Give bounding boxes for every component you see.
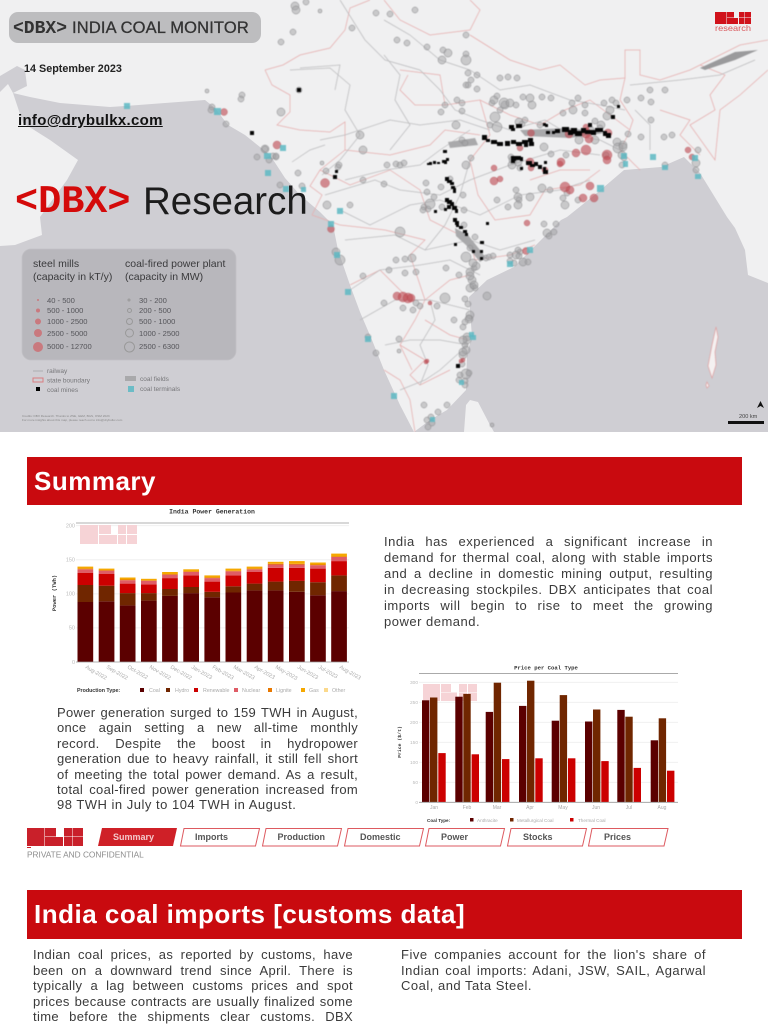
- nav: Production: Production: [278, 832, 325, 842]
- Sri Lanka: [464, 400, 494, 432]
- sea: [0, 93, 414, 432]
- month labels: Jun-2023: [296, 665, 319, 681]
- month labels: Apr: [526, 805, 534, 811]
- paragraph: India demand: imports will begin to rise to meet the growing: [384, 598, 713, 613]
- paragraph: power generation: once again setting a new all-time monthly: [57, 720, 358, 735]
- brand heading: [15, 180, 308, 224]
- legend: Other: [332, 688, 345, 694]
- paragraph: power generation: record. Despite the boost in hydropower: [57, 736, 358, 751]
- chart: India Power Generation: 50: [69, 626, 75, 632]
- legend: Coal: [149, 688, 160, 694]
- paragraph: coal prices: time before the shipments clear customs. DBX: [33, 1009, 353, 1024]
- nav: Domestic: Domestic: [360, 832, 401, 842]
- month labels: Jan-2023: [190, 665, 213, 681]
- paragraph: importing companies: Five companies account for the lion's share of: [401, 947, 706, 962]
- paragraph: coal prices: been on a downward trend since April. There is: [33, 963, 353, 978]
- paragraph: India demand: power demand.: [384, 614, 480, 629]
- nav: Imports: [180, 828, 260, 846]
- chart: Price per Coal Type: 300: [410, 680, 418, 686]
- month labels: Jun: [592, 805, 600, 811]
- top-right research logo: research: [715, 23, 751, 33]
- legend: [77, 688, 345, 694]
- coal-fired power plants: [205, 0, 701, 430]
- footer logo: [27, 828, 83, 848]
- map panel: India coal infrastructure: [0, 0, 768, 432]
- month labels: [430, 805, 667, 811]
- chart: Price per Coal Type: Price per Coal Type: [514, 664, 579, 672]
- chart: Price per Coal Type: 200: [410, 720, 418, 726]
- map key: lines, mines, fields: state boundary: [47, 378, 91, 384]
- map legend panel: (capacity in MW): [125, 271, 203, 283]
- map legend panel: 2500 - 6300: [139, 342, 180, 351]
- title pill: [9, 12, 261, 43]
- grouped bars: [422, 681, 674, 802]
- chart: India Power Generation: Power (TWh): [51, 575, 58, 611]
- chart: India Power Generation: India Power Generation: [169, 508, 255, 516]
- heading: India coal imports: India coal imports [customs data]: [34, 899, 465, 929]
- month labels: Apr-2023: [253, 665, 276, 681]
- railway lines: [290, 0, 755, 390]
- map legend panel: steel mills: [33, 258, 79, 270]
- map legend panel: [22, 249, 236, 360]
- chart: India Power Generation: 0: [72, 660, 75, 666]
- map legend panel: 30 - 200: [139, 296, 167, 305]
- brand heading: <DBX>: [15, 180, 131, 224]
- paragraph: coal prices: typically a lag between customs prices and spot: [33, 978, 353, 993]
- coal terminals: [124, 103, 701, 422]
- month labels: Nov-2022: [148, 665, 172, 682]
- chart: Price per Coal Type: Price ($/t): [397, 726, 403, 758]
- brand heading: Research: [143, 180, 308, 223]
- north arrow and scale bar: 200 km: [739, 414, 758, 420]
- legend: [427, 818, 606, 823]
- map legend panel: 1000 - 2500: [47, 317, 88, 326]
- month labels: May-2023: [274, 665, 298, 682]
- state boundaries: [265, 0, 768, 432]
- chart: India Power Generation: 200: [66, 524, 75, 530]
- nav: Summary: [98, 828, 177, 846]
- map legend panel: 500 - 1000: [47, 306, 83, 315]
- chart: Price per Coal Type: 150: [410, 740, 418, 746]
- nav: Imports: Imports: [195, 832, 228, 842]
- legend: Thermal Coal: [578, 818, 606, 823]
- stacked bars: [78, 554, 347, 662]
- paragraph: India demand: demand for thermal coal, along with stable imports: [384, 550, 713, 565]
- legend: Renewable: [203, 688, 230, 694]
- nav: Production: [262, 828, 342, 846]
- chart: Price per Coal Type: 0: [415, 800, 418, 806]
- legend: Hydro: [175, 688, 189, 694]
- map key: lines, mines, fields: For more insights about this map, please reach out to info@drybulkx.com: [22, 418, 123, 422]
- paragraph: power generation: Power generation surged to 159 TWH in August,: [57, 705, 358, 720]
- contact email: info@drybulkx.com: [18, 112, 163, 129]
- month labels: Aug-2023: [338, 665, 362, 682]
- legend: Gas: [309, 688, 319, 694]
- month labels: Oct-2022: [126, 665, 149, 681]
- heading: India coal imports: [27, 890, 742, 939]
- heading: Summary: Summary: [34, 466, 156, 496]
- chart: Price per Coal Type: 250: [410, 700, 418, 706]
- paragraph: power generation: 98 TWH in July to 104 TWH in August.: [57, 797, 296, 812]
- map key: lines, mines, fields: [22, 368, 181, 422]
- month labels: Jul: [626, 805, 632, 811]
- map legend panel: 200 - 500: [139, 306, 171, 315]
- navigation bar and footer: [27, 828, 669, 860]
- nav: Stocks: [508, 828, 586, 846]
- nav: Power: Power: [441, 832, 469, 842]
- date: 14 September 2023: [24, 63, 122, 75]
- paragraph: power generation: generation due to heavy rainfall, it still fell short: [57, 751, 358, 766]
- map legend panel: coal-fired power plant: [125, 258, 225, 270]
- top-right research logo: [715, 12, 751, 33]
- month labels: Sep-2022: [105, 665, 129, 682]
- nav: Prices: Prices: [604, 832, 631, 842]
- map key: lines, mines, fields: coal mines: [47, 387, 79, 394]
- map legend panel: 5000 - 12700: [47, 342, 92, 351]
- chart: India Power Generation: 100: [66, 592, 75, 598]
- nav: Stocks: Stocks: [523, 832, 553, 842]
- paragraph: India demand: [384, 534, 713, 629]
- legend: Coal Type:: [427, 818, 451, 823]
- month labels: Feb-2023: [211, 665, 234, 682]
- map legend panel: 500 - 1000: [139, 317, 175, 326]
- chart: Price per Coal Type: 100: [410, 760, 418, 766]
- map legend panel: 2500 - 5000: [47, 329, 88, 338]
- map legend panel: (capacity in kT/y): [33, 271, 112, 283]
- paragraph: India demand: and a decline in domestic mining output, resulting: [384, 566, 713, 581]
- paragraph: India demand: in decreasing stockpiles. DBX anticipates that coal: [384, 582, 713, 597]
- legend: Production Type:: [77, 688, 120, 694]
- nav: Prices: [588, 828, 668, 846]
- pink logo watermark: [423, 684, 477, 701]
- month labels: [84, 665, 362, 682]
- paragraph: importing companies: Indian coal imports: Adani, JSW, SAIL, Agarwal: [401, 963, 706, 978]
- coal mines: [250, 88, 620, 368]
- paragraph: power generation: of meeting the total power demand. As a result,: [57, 767, 358, 782]
- pink logo watermark: [80, 525, 137, 544]
- month labels: Aug: [658, 805, 667, 811]
- paragraph: power generation: total coal-fired power generation increased from: [57, 782, 358, 797]
- paragraph: coal prices: [33, 947, 353, 1024]
- month labels: Jul-2023: [317, 665, 338, 680]
- chart: India Power Generation: 150: [66, 558, 75, 564]
- Andaman islands: [706, 327, 718, 388]
- month labels: May: [558, 805, 568, 811]
- chart: Price per Coal Type: 50: [413, 780, 418, 786]
- confidentiality note: PRIVATE AND CONFIDENTIAL: [27, 850, 144, 860]
- chart: Price per Coal Type: [397, 664, 678, 823]
- legend: Nuclear: [242, 688, 260, 694]
- map key: lines, mines, fields: coal terminals: [140, 386, 181, 393]
- paragraph: importing companies: [401, 947, 706, 993]
- paragraph: power generation: [57, 705, 358, 812]
- nav: Summary: Summary: [113, 832, 154, 842]
- month labels: Mar: [493, 805, 502, 811]
- legend: Metallurgical Coal: [517, 818, 554, 823]
- heading: Summary: [27, 457, 742, 505]
- month labels: Jan: [430, 805, 438, 811]
- map legend panel: 1000 - 2500: [139, 329, 180, 338]
- legend: Anthracite: [477, 818, 498, 823]
- paragraph: importing companies: Coal, and Tata Steel.: [401, 978, 532, 993]
- map key: lines, mines, fields: railway: [47, 368, 68, 375]
- legend: Lignite: [276, 688, 292, 694]
- map legend panel: 40 - 500: [47, 296, 75, 305]
- nav: Power: [426, 828, 504, 846]
- month labels: Dec-2022: [169, 665, 193, 682]
- north arrow and scale bar: [728, 401, 764, 424]
- coal fields: [448, 50, 758, 262]
- chart: India Power Generation: [51, 508, 362, 694]
- paragraph: India demand: India has experienced a significant increase in: [384, 534, 713, 549]
- map key: lines, mines, fields: Credits: DBX Research. Thanks to ZSE, GEM, BGS, OSM 2023: [22, 414, 110, 418]
- title pill: <DBX> INDIA COAL MONITOR: [13, 19, 249, 39]
- paragraph: coal prices: prices because contracts are usually finalized some: [33, 994, 353, 1009]
- month labels: Aug-2022: [84, 665, 108, 682]
- map key: lines, mines, fields: coal fields: [140, 376, 170, 383]
- steel mills: [220, 108, 695, 364]
- paragraph: coal prices: Indian coal prices, as reported by customs, have: [33, 947, 353, 962]
- month labels: Mar-2023: [232, 665, 255, 682]
- month labels: Feb: [463, 805, 472, 811]
- nav: Domestic: [344, 828, 424, 846]
